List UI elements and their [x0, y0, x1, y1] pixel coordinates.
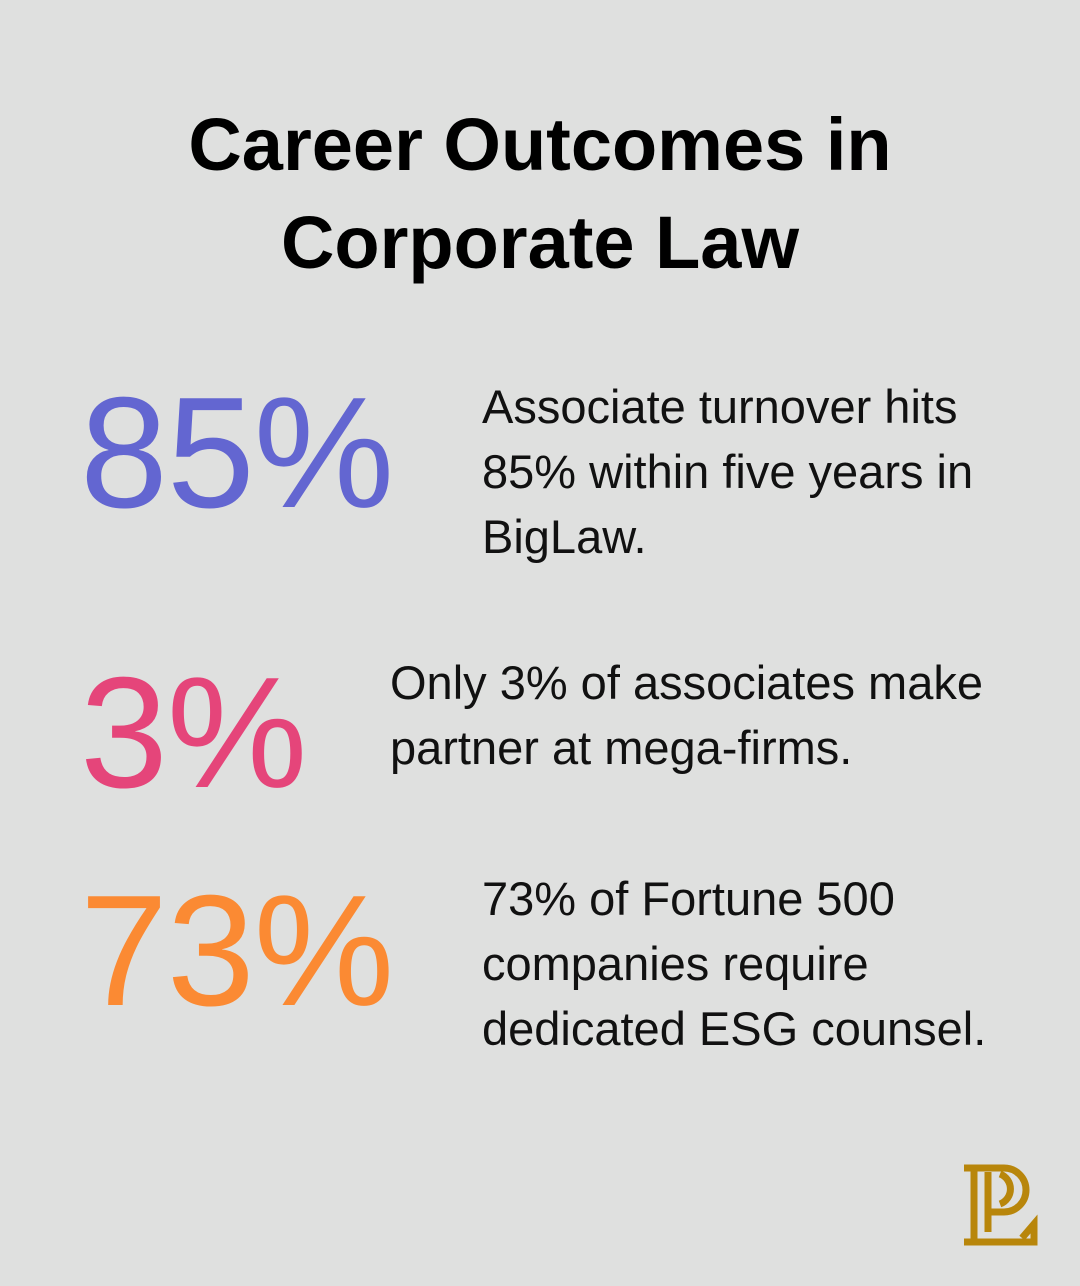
- title: Career Outcomes in: [188, 103, 892, 186]
- number 85%: 85%: [80, 365, 393, 541]
- description 3%: Only 3% of associates make partner at mega-firms.: [390, 656, 983, 774]
- logo: [964, 1164, 1038, 1246]
- title: Corporate Law: [281, 201, 799, 284]
- title: [188, 103, 892, 284]
- stat: 3%: [80, 645, 983, 821]
- number 3%: 3%: [80, 645, 306, 821]
- stat: 73%: [80, 863, 986, 1055]
- stat: 85%: [80, 365, 973, 563]
- number 73%: 73%: [80, 863, 393, 1039]
- description 85%: Associate turnover hits 85% within five years in BigLaw.: [482, 380, 973, 563]
- description 73%: 73% of Fortune 500 companies require dedicated ESG counsel.: [482, 872, 986, 1055]
